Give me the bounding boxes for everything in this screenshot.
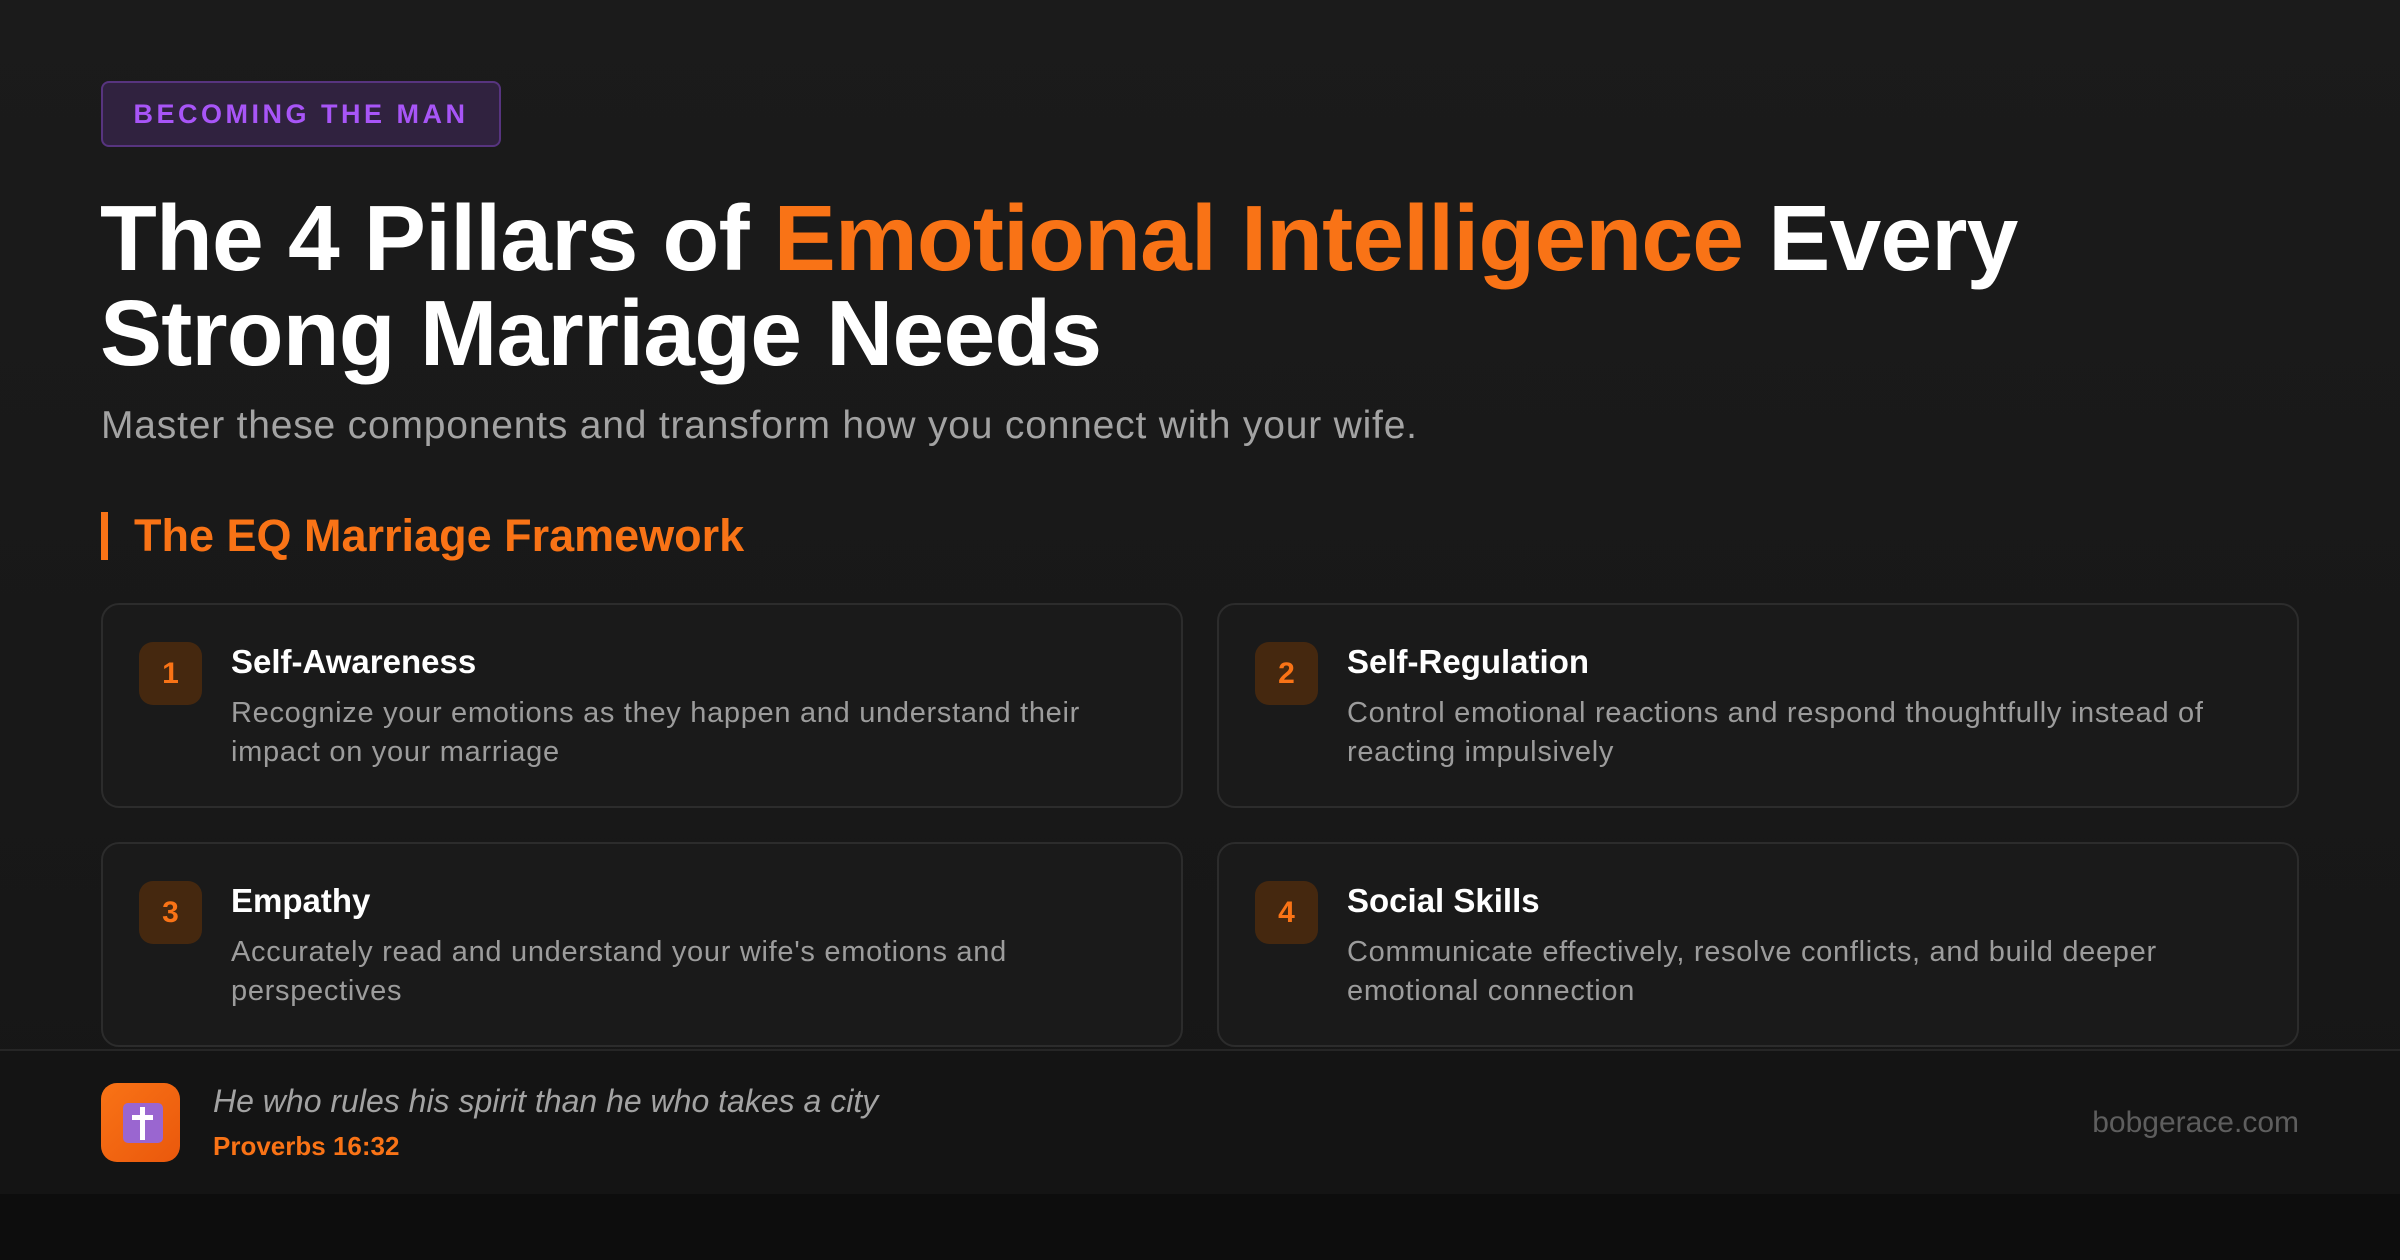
card text 2 [1347,697,2204,768]
card text 2: Control emotional reactions and respond thoughtfully instead of [1347,697,2204,729]
title: Strong Marriage Needs [100,281,1101,385]
card title 3: Empathy [231,882,370,919]
section heading: The EQ Marriage Framework [134,510,744,561]
card text 2: reacting impulsively [1347,736,1614,768]
card text 4: emotional connection [1347,975,1635,1007]
title [100,186,2018,385]
website: bobgerace.com [2092,1106,2299,1139]
number 2: 2 [1278,657,1295,690]
badge: BECOMING THE MAN [134,99,468,129]
card text 4: Communicate effectively, resolve conflicts, and build deeper [1347,936,2157,968]
number 1: 1 [162,657,179,690]
card text 1: impact on your marriage [231,736,560,768]
title: The 4 Pillars of Emotional Intelligence Every [100,186,2018,290]
reference: Proverbs 16:32 [213,1131,399,1161]
icon: cross [101,1083,180,1162]
number 4 [1255,881,1318,944]
card title 4: Social Skills [1347,882,1540,919]
card text 1: Recognize your emotions as they happen and understand their [231,697,1080,729]
number 3: 3 [162,896,179,929]
card 4 [1217,842,2299,1047]
card text 3 [231,936,1007,1007]
subtitle: Master these components and transform how you connect with your wife. [101,404,1418,447]
card 3 [101,842,1183,1047]
number 2 [1255,642,1318,705]
footer [0,1049,2400,1194]
card text 4 [1347,936,2157,1007]
number 4: 4 [1278,896,1295,929]
card text 3: perspectives [231,975,402,1007]
card 1 [101,603,1183,808]
quote: He who rules his spirit than he who takes a city [213,1083,878,1119]
card title 2: Self-Regulation [1347,643,1589,680]
card text 1 [231,697,1080,768]
card title 1: Self-Awareness [231,643,476,680]
number 3 [139,881,202,944]
card text 3: Accurately read and understand your wife's emotions and [231,936,1007,968]
badge [101,81,501,147]
card 2 [1217,603,2299,808]
number 1 [139,642,202,705]
